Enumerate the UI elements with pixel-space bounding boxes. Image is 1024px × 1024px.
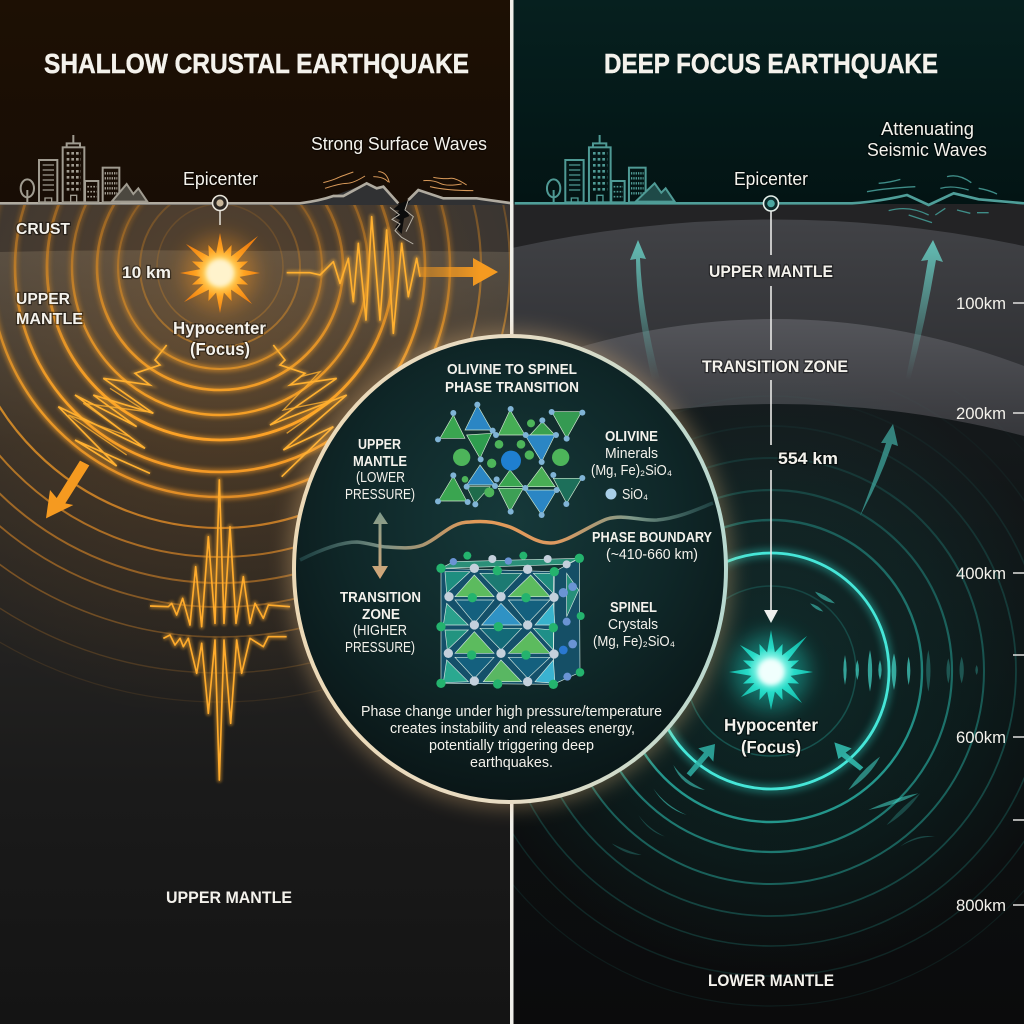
- disc glow: [288, 330, 732, 808]
- phase boundary curve: [300, 503, 713, 560]
- explanatory text: Phase change under high pressure/temperature: [361, 704, 662, 720]
- disc: [294, 336, 726, 802]
- label: 554 km: 554 km: [778, 449, 838, 468]
- spinel crystal structure: [436, 552, 585, 689]
- lower mantle layer: [512, 404, 1024, 1024]
- depth scale: 100km: [956, 294, 1006, 313]
- label: transition zone higher pressure: ZONE: [362, 607, 400, 623]
- heading: olivine to spinel: PHASE TRANSITION: [445, 380, 579, 396]
- label: epicenter left: Epicenter: [183, 169, 258, 189]
- surface line right: [515, 176, 1024, 223]
- label: attenuating seismic waves: Attenuating: [881, 118, 974, 139]
- label: attenuating seismic waves: [867, 118, 987, 160]
- label: hypocenter left: Hypocenter: [173, 318, 266, 338]
- label: upper mantle bottom: UPPER MANTLE: [166, 888, 292, 907]
- teal wave pulses: [612, 592, 978, 855]
- sky background left: [0, 0, 511, 205]
- icon: city skyline: [21, 135, 147, 202]
- label: phase boundary: [592, 530, 712, 563]
- arrow: inward wave lower right: [834, 742, 863, 771]
- crust layer left: [0, 204, 511, 252]
- label: upper mantle lower pressure: MANTLE: [353, 454, 407, 470]
- arrow: surface wave direction: [419, 258, 498, 286]
- arrow: pressure direction: [372, 512, 388, 579]
- transition zone layer: [512, 319, 1024, 440]
- heading: olivine to spinel: OLIVINE TO SPINEL: [447, 362, 577, 378]
- marker: epicenter right: [764, 196, 778, 211]
- label: hypocenter right: [724, 715, 818, 757]
- label: olivine: [591, 429, 672, 503]
- seismogram: horizontal burst: [287, 217, 420, 333]
- depth line from epicenter to hypocenter: [764, 211, 778, 623]
- label: spinel: [593, 600, 675, 650]
- label: upper mantle lower pressure: [345, 437, 415, 503]
- label: transition zone higher pressure: [340, 590, 421, 656]
- heading left: SHALLOW CRUSTAL EARTHQUAKE: [44, 48, 469, 79]
- upper mantle layer left: [0, 250, 511, 1024]
- explanatory text: potentially triggering deep: [429, 738, 594, 754]
- label: transition zone higher pressure: TRANSITION: [340, 590, 421, 606]
- label: upper mantle left: MANTLE: [16, 311, 83, 328]
- label: upper mantle left: [16, 291, 83, 328]
- label: hypocenter left: (Focus): [190, 339, 250, 359]
- label: crust: CRUST: [16, 221, 70, 238]
- label: transition zone higher pressure: PRESSURE): [345, 640, 415, 656]
- label: spinel: SPINEL: [610, 600, 657, 616]
- explanatory text: [361, 704, 662, 771]
- divider: [510, 0, 514, 1024]
- surface with fault relief: [0, 172, 512, 244]
- label: spinel: (Mg, Fe)₂SiO₄: [593, 634, 675, 650]
- seismic wave rings left: [0, 205, 510, 702]
- label: transition zone right: TRANSITION ZONE: [702, 357, 848, 376]
- heading: olivine to spinel: [445, 362, 579, 396]
- label: olivine: OLIVINE: [605, 429, 658, 445]
- label: transition zone higher pressure: (HIGHER: [353, 623, 407, 639]
- hypocenter star right: [729, 630, 813, 710]
- seismogram: vertical burst: [150, 480, 290, 780]
- depth scale: [956, 294, 1024, 915]
- heading right: DEEP FOCUS EARTHQUAKE: [604, 48, 938, 79]
- icon: city skyline right: [547, 135, 675, 202]
- seismic wave rings right: [514, 426, 1024, 1006]
- label: phase boundary: (~410-660 km): [606, 547, 698, 563]
- panel: shallow crustal earthquake: [0, 0, 510, 903]
- label: 10 km: 10 km: [122, 263, 171, 282]
- explanatory text: creates instability and releases energy,: [390, 721, 635, 737]
- label: upper mantle lower pressure: (LOWER: [356, 470, 405, 486]
- label: olivine: Minerals: [605, 446, 658, 462]
- label: hypocenter left: [173, 318, 266, 359]
- arrow: rising wave lower right: [860, 424, 898, 516]
- label: attenuating seismic waves: Seismic Waves: [867, 139, 987, 160]
- label: olivine: (Mg, Fe)₂SiO₄: [591, 463, 672, 479]
- label: upper mantle right: UPPER MANTLE: [709, 262, 833, 281]
- label: upper mantle left: UPPER: [16, 291, 70, 308]
- label: epicenter right: Epicenter: [734, 169, 808, 189]
- arrow: rising wave left: [630, 240, 660, 380]
- teal glow: [512, 372, 1024, 1024]
- depth scale: 400km: [956, 564, 1006, 583]
- label: phase boundary: PHASE BOUNDARY: [592, 530, 712, 546]
- depth scale: 600km: [956, 728, 1006, 747]
- arrow: inward wave lower left: [687, 744, 715, 777]
- label: hypocenter right: Hypocenter: [724, 715, 818, 735]
- panel: olivine to spinel phase transition: [288, 330, 732, 808]
- arrow: rising wave right: [906, 240, 943, 380]
- arrow: down-left wave direction: [46, 461, 89, 518]
- explanatory text: earthquakes.: [470, 755, 553, 771]
- depth scale: 200km: [956, 404, 1006, 423]
- depth scale: 800km: [956, 896, 1006, 915]
- label: strong surface waves: Strong Surface Waves: [311, 133, 487, 154]
- panel: deep focus earthquake: [514, 0, 1024, 1006]
- label: spinel: Crystals: [608, 617, 658, 633]
- zigzag wave bursts: [58, 345, 347, 477]
- label: upper mantle lower pressure: PRESSURE): [345, 487, 415, 503]
- marker: epicenter left: [212, 196, 228, 225]
- label: hypocenter right: (Focus): [741, 737, 801, 757]
- upper mantle layer right: [512, 219, 1024, 440]
- label: lower mantle: LOWER MANTLE: [708, 971, 834, 990]
- label: olivine: SiO₄: [622, 487, 648, 503]
- label: upper mantle lower pressure: UPPER: [358, 437, 401, 453]
- hypocenter star left: [180, 233, 260, 313]
- orange glow: [0, 205, 511, 1024]
- sky background right: [512, 0, 1024, 205]
- olivine crystal structure: [435, 402, 585, 518]
- crust layer right: [512, 204, 1024, 264]
